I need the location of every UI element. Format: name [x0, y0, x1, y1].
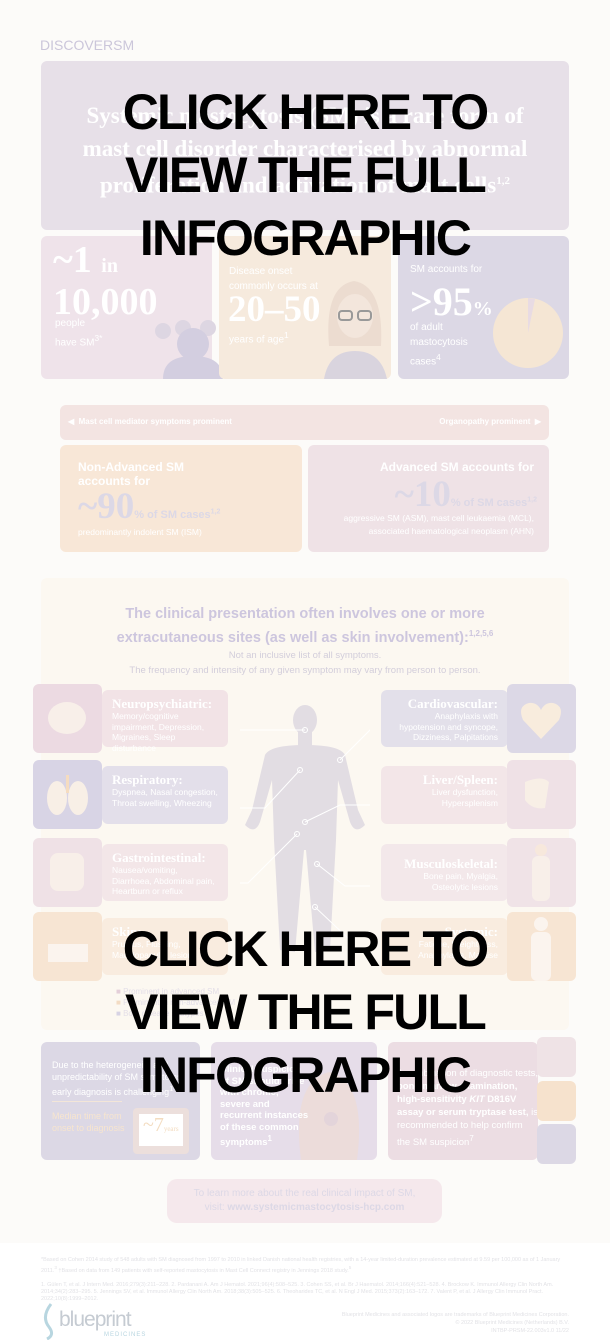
figure: human body: [240, 705, 370, 952]
card: skin: Pruritus, Flushing,: [112, 939, 180, 949]
legend: ■ Both disease subtypes: [116, 1009, 204, 1018]
icon: lungs: [33, 760, 102, 829]
chart: pie: [493, 298, 563, 368]
card: systemic: Anaphylaxis, Malaise: [418, 950, 498, 960]
panel: 95% stat: SM accounts for: [410, 264, 482, 275]
card: cardiovascular: Dizziness, Palpitations: [413, 732, 498, 742]
callout: learn more URL: To learn more about the real clinical impact of SM,: [194, 1188, 415, 1199]
callout: learn more URL: [167, 1179, 442, 1223]
card: respiratory: Dyspnea, Nasal congestion,: [112, 787, 218, 797]
card: respiratory: Throat swelling, Wheezing: [112, 798, 212, 808]
subtext: Not an inclusive list of all symptoms.: [229, 650, 381, 661]
icon: liver: [507, 760, 576, 829]
card: gastrointestinal: [102, 844, 228, 901]
stat text: ~1 in: [53, 239, 118, 281]
icon: heart: [507, 684, 576, 753]
panel: clinical suspicion: [211, 1042, 377, 1160]
panel: prevalence stat: people: [55, 318, 85, 329]
panel: non-advanced SM: predominantly indolent SM (ISM): [78, 527, 202, 537]
panel: onset age: [219, 236, 391, 379]
callout: learn more URL: visit: www.systemicmastocytosis-hcp.com: [205, 1202, 404, 1213]
overlay: click here (bottom): INFOGRAPHIC: [140, 1047, 470, 1103]
card: skin: Maculopapular lesions: [112, 950, 197, 960]
title text: mast cell disorder characterised by abnormal: [83, 136, 527, 161]
icon: bone: [537, 1037, 576, 1077]
card: respiratory: [102, 766, 228, 824]
panel: onset age: years of age1: [229, 330, 289, 345]
logo: blueprint medicines: [44, 1303, 146, 1340]
legal text: INTBP-PRSM-22.003v1.0 11/22: [491, 1328, 569, 1334]
card: musculoskeletal: Osteolytic lesions: [432, 882, 498, 892]
panel: onset age: Disease onset: [229, 266, 292, 277]
panel: advanced SM: aggressive SM (ASM), mast cell leukaemia (MCL),: [344, 513, 534, 523]
icon: people: [155, 320, 223, 379]
brand: DISCOVERSM: DISCOVERSM: [40, 37, 134, 53]
card: skin: [102, 918, 228, 975]
overlay: click here (bottom): CLICK HERE TO: [123, 921, 487, 977]
overlay: click here (top): INFOGRAPHIC: [140, 210, 470, 266]
card: respiratory: Respiratory:: [112, 772, 183, 787]
panel: non-advanced SM: Non-Advanced SM: [78, 460, 184, 474]
icon: test rack: [537, 1124, 576, 1164]
card: liver/spleen: Hypersplenism: [442, 798, 498, 808]
overlay: click here (top): CLICK HERE TO: [123, 84, 487, 140]
card: systemic: Fatigue, Weight loss,: [419, 939, 498, 949]
card: musculoskeletal: [381, 844, 508, 901]
subtext: [129, 650, 481, 676]
panel: onset age: commonly occurs at: [229, 281, 318, 292]
icon: woman: [324, 281, 387, 379]
card: gastrointestinal: Nausea/vomiting,: [112, 865, 178, 875]
icon: calendar: [133, 1108, 189, 1154]
panel: advanced SM: ~10% of SM cases1,2: [395, 474, 537, 515]
panel: diagnosis delay: onset to diagnosis: [52, 1122, 125, 1132]
icon: intestines: [33, 838, 102, 907]
icon: brain: [33, 684, 102, 753]
arrow bar: symptom spectrum: ◀ Mast cell mediator symptoms prominent: [68, 417, 232, 426]
panel: non-advanced SM: accounts for: [78, 474, 150, 488]
footnotes: *Based on Cohen 2014 study of 548 adults with SM diagnosed from 1997 to 2010 in linked Danish national health registries, with a 14-year limited-duration prevalence estimated at 9.59 per 100,000 as of 1 January 2011.3 †Based on data from 149 patients with self-reported mastocytosis in Mast Cell Connect registry in Jennings 2018 study.5: [41, 1257, 560, 1274]
legend: ■ Prominent in non-advanced SM: [116, 998, 235, 1007]
card: neuropsychiatric: Neuropsychiatric:: [112, 696, 212, 711]
overlay: click here (bottom): VIEW THE FULL: [125, 984, 485, 1040]
icon: skeleton: [507, 838, 576, 907]
panel: diagnostic tests: [388, 1042, 538, 1160]
panel: prevalence stat: [41, 236, 212, 379]
panel: 95% stat: of adult: [410, 322, 443, 333]
card: gastrointestinal: Gastrointestinal:: [112, 850, 206, 865]
card: neuropsychiatric: Memory/cognitive: [112, 711, 179, 721]
panel: 95% stat: mastocytosis: [410, 337, 468, 348]
logo: blueprint medicines: MEDICINES: [104, 1332, 146, 1338]
subtext: The frequency and intensity of any given symptom may vary from person to person.: [129, 665, 481, 676]
panel: clinical suspicion: Clinical suspicion of SM should arise with chronic, severe and recurrent instances of these common symptoms1: [220, 1064, 308, 1148]
overlay: click here (top): [123, 84, 488, 266]
legal text: [342, 1312, 569, 1334]
arrow bar: symptom spectrum: Organopathy prominent ▶: [439, 417, 541, 426]
legal text: Blueprint Medicines and associated logos are trademarks of Blueprint Medicines Corporation.: [342, 1312, 569, 1318]
arrow bar: symptom spectrum: [60, 405, 549, 440]
panel: title: [41, 61, 569, 230]
card: neuropsychiatric: Migraines, Sleep disturbance: [112, 732, 175, 752]
card: skin: Skin:: [112, 924, 142, 939]
panel: onset age: 20–50: [228, 289, 320, 330]
legal text: © 2022 Blueprint Medicines (Netherlands) B.V.: [455, 1320, 569, 1326]
card: musculoskeletal: Musculoskeletal:: [404, 856, 498, 871]
panel: clinical presentation: [41, 578, 569, 1030]
card: cardiovascular: [381, 690, 508, 747]
figure: torso: [299, 1072, 359, 1160]
footer band: [0, 1243, 610, 1341]
panel: 95% stat: cases4: [410, 352, 441, 367]
overlay: click here (bottom): [123, 921, 488, 1103]
panel: diagnosis delay: [41, 1042, 200, 1160]
panel: diagnosis delay: Due to the heterogeneity and unpredictability of SM symptoms, early diagnosis is challenging1: [52, 1060, 184, 1097]
title text: Systemic mastocytosis (SM) is a rare form of: [86, 103, 524, 128]
card: systemic: Systemic:: [445, 924, 498, 939]
stat text: 10,000: [53, 281, 158, 323]
panel: diagnosis delay: Median time from: [52, 1111, 122, 1121]
icon: body organs: [507, 912, 576, 981]
panel: advanced SM: associated haematological neoplasm (AHN): [369, 526, 534, 536]
card: gastrointestinal: Diarrhoea, Abdominal pain,: [112, 876, 215, 886]
panel: non-advanced SM: ~90% of SM cases1,2: [78, 486, 220, 527]
panel: prevalence stat: have SM3*: [55, 333, 102, 348]
card: liver/spleen: [381, 766, 508, 824]
card: cardiovascular: Cardiovascular:: [408, 696, 498, 711]
heading: extracutaneous sites (as well as skin involvement):1,2,5,6: [117, 629, 493, 646]
card: cardiovascular: hypotension and syncope,: [399, 722, 498, 732]
icon: calendar: ~7years: [143, 1114, 179, 1136]
panel: diagnostic tests: A combination of diagnostic tests, bone marrow examination, high-sensitivity KIT D816V assay or serum tryptase test, is recommended to help confirm the SM suspicion7: [397, 1068, 538, 1148]
panel: advanced SM: [308, 445, 549, 552]
logo: blueprint medicines: blueprint: [59, 1308, 131, 1331]
panel: 95% stat: >95%: [410, 279, 493, 324]
footnotes: [41, 1257, 560, 1302]
icon: skin: [33, 912, 102, 981]
icon: test tube: [537, 1081, 576, 1121]
card: liver/spleen: Liver/Spleen:: [423, 772, 498, 787]
panel: 95% stat: [398, 236, 569, 379]
card: neuropsychiatric: [102, 690, 228, 747]
title text: [83, 103, 527, 198]
card: systemic: [381, 918, 508, 975]
legend: [116, 987, 235, 1018]
panel: advanced SM: Advanced SM accounts for: [380, 460, 534, 474]
panel: non-advanced SM: [60, 445, 302, 552]
title text: proliferation and activation of mast cells1,2: [100, 173, 510, 198]
card: gastrointestinal: Heartburn or reflux: [112, 886, 183, 896]
heading: [117, 606, 493, 646]
stat text: [53, 239, 158, 323]
card: liver/spleen: Liver dysfunction,: [432, 787, 498, 797]
heading: The clinical presentation often involves one or more: [125, 606, 485, 622]
footnotes: 1. Gülen T, et al. J Intern Med. 2016;279(3):211–228. 2. Pardanani A. Am J Hematol. 2021;96(4):508–525. 3. Cohen SS, et al. Br J Haematol. 2014;166(4):521–528. 4. Brockow K. Immunol Allergy Clin North Am. 2014;34(2):283–295. 5. Jennings SV, et al. Immunol Allergy Clin North Am. 2018;38(3):505–525. 6. Theoharides TC, et al. N Engl J Med. 2015;373(2):163–172. 7. Valent P, et al. J Allergy Clin Immunol Pract. 2022;10(8):1999–2012.: [41, 1282, 553, 1302]
card: musculoskeletal: Bone pain, Myalgia,: [423, 871, 498, 881]
legend: ■ Prominent in advanced SM: [116, 987, 219, 996]
card: neuropsychiatric: impairment, Depression,: [112, 722, 204, 732]
overlay: click here (top): VIEW THE FULL: [125, 147, 485, 203]
card: cardiovascular: Anaphylaxis with: [435, 711, 498, 721]
